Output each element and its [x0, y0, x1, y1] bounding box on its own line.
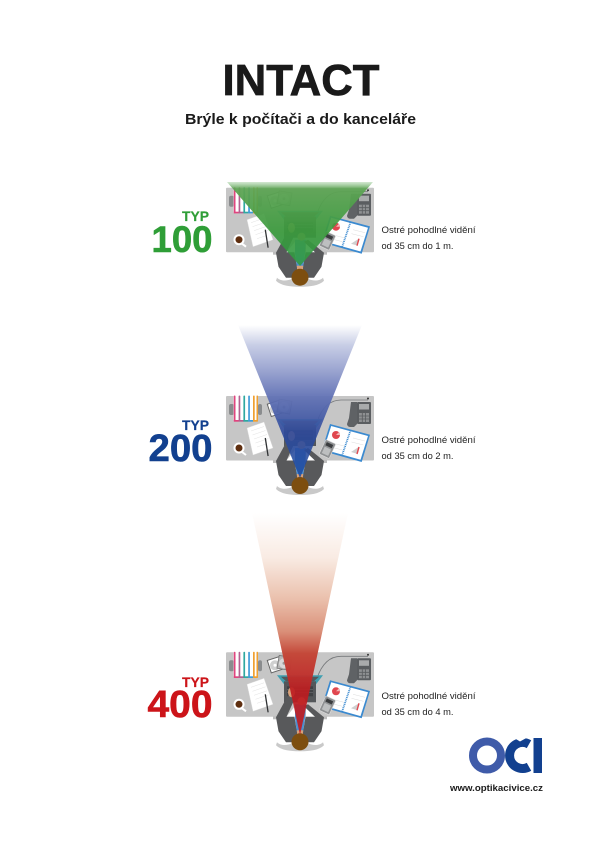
- binders: [229, 187, 262, 213]
- number 100: 100: [152, 219, 212, 260]
- discs: [267, 399, 292, 417]
- logo letter O: [473, 742, 501, 770]
- person: [273, 223, 327, 287]
- person: [273, 687, 327, 751]
- description 400: Ostré pohodlné vidění: [382, 691, 476, 701]
- desk illustration 400: [226, 652, 374, 751]
- label TYP: TYP: [182, 208, 209, 224]
- description 200: Ostré pohodlné vidění: [382, 435, 476, 445]
- discs: [267, 191, 292, 208]
- panel: type 100: [152, 182, 476, 287]
- telephone: [317, 654, 371, 683]
- description 100: od 35 cm do 1 m.: [382, 241, 454, 251]
- number 400: 400: [148, 684, 212, 726]
- coffee cup: [234, 442, 246, 455]
- description 400: od 35 cm do 4 m.: [382, 707, 454, 717]
- desk: [226, 652, 374, 717]
- notebook: [322, 424, 370, 462]
- desk illustration 100: [226, 187, 374, 287]
- desk: [226, 396, 374, 460]
- coffee cup: [234, 234, 246, 247]
- logo OCI: [473, 736, 542, 773]
- calculator: [319, 696, 336, 715]
- paper and pen: [247, 214, 273, 248]
- laptop: [277, 211, 323, 238]
- laptop: [277, 419, 323, 446]
- red vision cone: [252, 513, 348, 735]
- notebook: [322, 216, 370, 254]
- binders: [229, 396, 262, 422]
- desk illustration 200: [226, 396, 374, 495]
- label TYP: TYP: [182, 674, 209, 690]
- paper and pen: [247, 422, 273, 456]
- panel: type 200: [148, 325, 476, 495]
- discs: [267, 655, 292, 673]
- coffee cup: [234, 699, 246, 711]
- telephone: [317, 189, 371, 219]
- title: INTACT: [222, 56, 380, 105]
- website address: www.optikacivice.cz: [449, 783, 544, 793]
- telephone: [317, 398, 371, 427]
- panel: type 400: [148, 513, 476, 751]
- label TYP: TYP: [182, 417, 209, 433]
- person: [273, 431, 327, 495]
- logo hacek notch: [511, 736, 530, 742]
- description 200: od 35 cm do 2 m.: [382, 451, 454, 461]
- description 100: Ostré pohodlné vidění: [382, 225, 476, 235]
- green vision cone: [227, 182, 373, 266]
- logo letter C: [510, 742, 529, 769]
- calculator: [319, 439, 336, 459]
- paper and pen: [247, 678, 273, 712]
- number 200: 200: [148, 428, 212, 470]
- logo letter I: [534, 738, 542, 773]
- subtitle: Brýle k počítači a do kanceláře: [185, 111, 416, 128]
- notebook: [322, 680, 370, 718]
- calculator: [319, 231, 336, 250]
- desk: [226, 188, 374, 252]
- laptop: [277, 675, 323, 702]
- binders: [229, 652, 262, 678]
- blue vision cone: [238, 325, 362, 478]
